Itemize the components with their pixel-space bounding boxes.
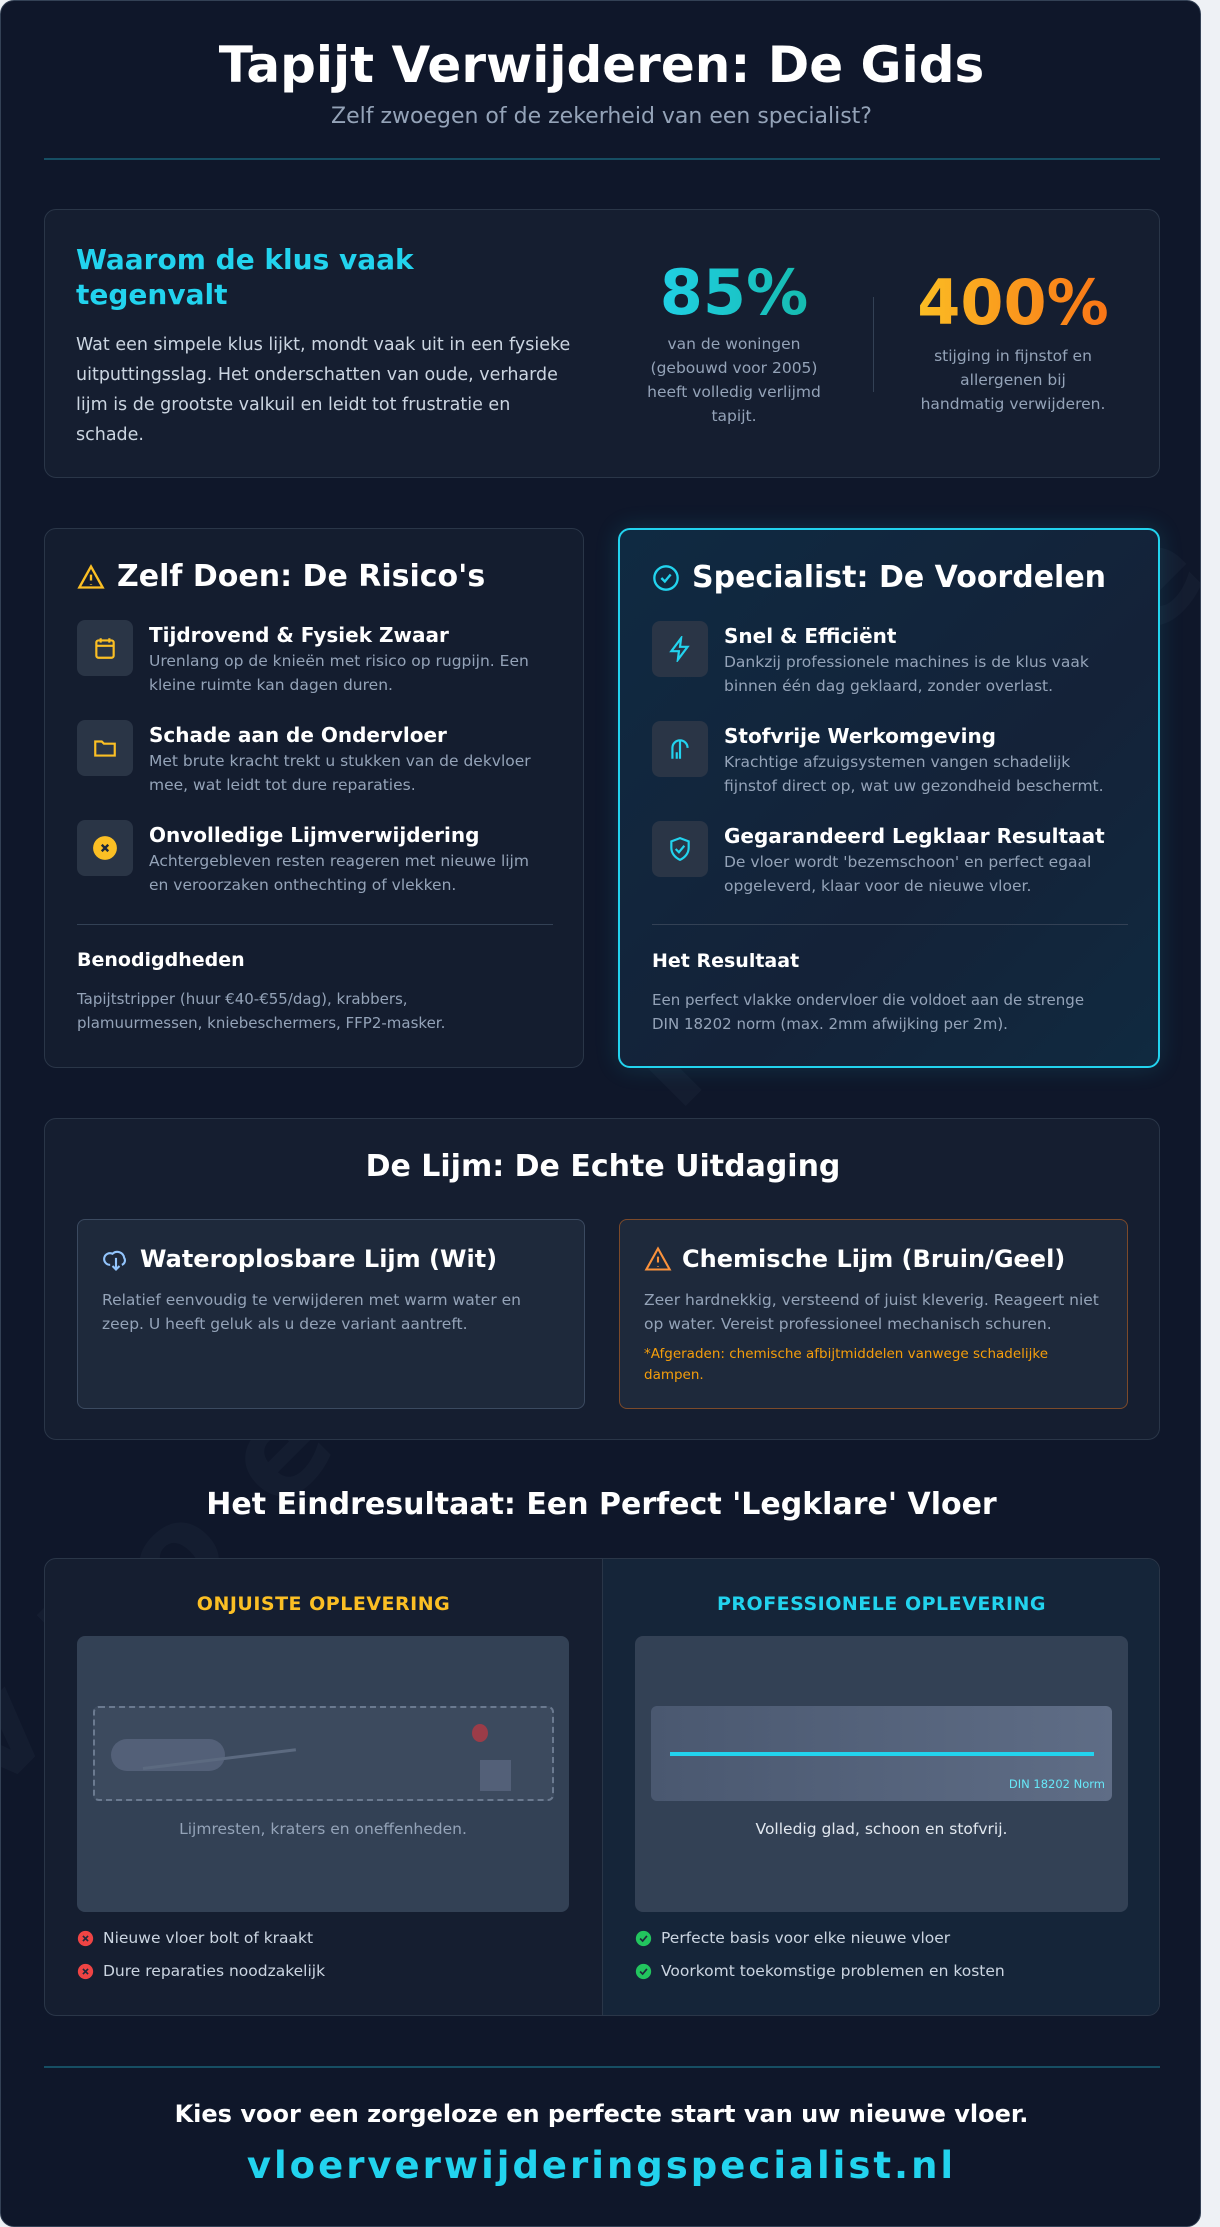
item snel: [652, 621, 1089, 695]
right illustration: [635, 1636, 1128, 1912]
het resultaat: Het Resultaat: [652, 950, 799, 972]
panel: compare: [44, 1558, 1160, 2016]
panel: specialist: Gegarandeerd Legklaar Resultaat: [724, 824, 1105, 848]
item 1: [77, 620, 529, 694]
panel: zelf doen: Urenlang op de knieën met risico op rugpijn. Een kleine ruimte kan dagen duren.: [149, 652, 529, 694]
panel: zelf doen: Achtergebleven resten reageren met nieuwe lijm en veroorzaken onthechting of vlekken.: [149, 852, 529, 894]
panel: zelf doen: Met brute kracht trekt u stukken van de dekvloer mee, wat leidt tot dure reparaties.: [149, 752, 531, 794]
stat 85%: van de woningen (gebouwd voor 2005) heeft volledig verlijmd tapijt.: [647, 335, 821, 425]
card: chemisch: Zeer hardnekkig, versteend of juist kleverig. Reageert niet op water. Vereist professioneel mechanisch schuren.: [644, 1291, 1099, 1333]
benodigdheden: [76, 949, 445, 1032]
card: chemisch: [619, 1219, 1128, 1409]
het resultaat: Een perfect vlakke ondervloer die voldoet aan de strenge DIN 18202 norm (max. 2mm afwijking per 2m).: [652, 991, 1084, 1033]
benodigdheden: Tapijtstripper (huur €40-€55/dag), krabbers, plamuurmessen, kniebeschermers, FFP2-masker.: [77, 990, 445, 1032]
right bullets: [636, 1929, 1005, 1980]
panel: specialist: Snel & Efficiënt: [724, 624, 896, 648]
left bullets: [78, 1929, 325, 1980]
item 2: [77, 720, 531, 794]
left bullets: Dure reparaties noodzakelijk: [103, 1962, 325, 1980]
panel: specialist: Krachtige afzuigsystemen vangen schadelijk fijnstof direct op, wat uw gezondheid beschermt.: [724, 753, 1104, 795]
heading specialist: Specialist: De Voordelen: [692, 560, 1106, 595]
panel: zelf doen: Onvolledige Lijmverwijdering: [149, 823, 479, 847]
panel: intro: [44, 209, 1160, 478]
left bullets: Nieuwe vloer bolt of kraakt: [103, 1929, 313, 1947]
left illustration: Lijmresten, kraters en oneffenheden.: [179, 1820, 467, 1838]
item 3: [77, 820, 529, 894]
item stofvrij: [652, 721, 1104, 795]
right bullets: Perfecte basis voor elke nieuwe vloer: [661, 1929, 950, 1947]
stat 85%: 85%: [660, 256, 808, 329]
right bullets: Voorkomt toekomstige problemen en kosten: [661, 1962, 1005, 1980]
card: wateroplosbaar: [77, 1219, 585, 1409]
item legklaar: [652, 821, 1105, 895]
subtitle: Zelf zwoegen of de zekerheid van een specialist?: [331, 104, 872, 129]
right label: PROFESSIONELE OPLEVERING: [717, 1593, 1046, 1615]
benodigdheden: Benodigdheden: [77, 949, 245, 971]
panel: zelf doen: Tijdrovend & Fysiek Zwaar: [149, 623, 449, 647]
panel: specialist: Dankzij professionele machines is de klus vaak binnen één dag geklaard, zonder overlast.: [724, 653, 1089, 695]
intro text: Wat een simpele klus lijkt, mondt vaak uit in een fysieke uitputtingsslag. Het onderschatten van oude, verharde lijm is de grootste valkuil en leidt tot frustratie en schade.: [76, 335, 570, 445]
footer url: vloerverwijderingspecialist.nl: [247, 2144, 956, 2187]
panel: specialist: Stofvrije Werkomgeving: [724, 724, 996, 748]
card: wateroplosbaar: Relatief eenvoudig te verwijderen met warm water en zeep. U heeft geluk als u deze variant aantreft.: [102, 1291, 521, 1333]
het resultaat: [652, 950, 1084, 1033]
stat 85%: [647, 256, 821, 425]
footer tagline: Kies voor een zorgeloze en perfecte start van uw nieuwe vloer.: [175, 2100, 1028, 2128]
heading zelf doen: Zelf Doen: De Risico's: [117, 559, 485, 594]
panel: zelf doen: Schade aan de Ondervloer: [149, 723, 447, 747]
panel: zelf doen: [44, 528, 584, 1068]
panel: specialist: De vloer wordt 'bezemschoon' en perfect egaal opgeleverd, klaar voor de nieuwe vloer.: [724, 853, 1091, 895]
heading eindresultaat: Het Eindresultaat: Een Perfect 'Legklare' Vloer: [206, 1487, 997, 1522]
right illustration: Volledig glad, schoon en stofvrij.: [756, 1820, 1007, 1838]
panel: lijm: [44, 1118, 1160, 1440]
left label: ONJUISTE OPLEVERING: [197, 1593, 450, 1615]
left illustration: [77, 1636, 569, 1912]
stat 400%: 400%: [917, 266, 1109, 339]
stat 400%: [917, 266, 1109, 413]
lijm heading: De Lijm: De Echte Uitdaging: [366, 1149, 840, 1184]
card: chemisch: Chemische Lijm (Bruin/Geel): [682, 1245, 1065, 1273]
right illustration: DIN 18202 Norm: [1009, 1777, 1105, 1791]
title: Tapijt Verwijderen: De Gids: [219, 36, 984, 94]
panel: specialist: [618, 528, 1160, 1068]
stat 400%: stijging in fijnstof en allergenen bij handmatig verwijderen.: [921, 347, 1105, 413]
intro heading: Waarom de klus vaak tegenvalt: [76, 243, 414, 311]
card: wateroplosbaar: Wateroplosbare Lijm (Wit): [140, 1245, 497, 1273]
card: chemisch: *Afgeraden: chemische afbijtmiddelen vanwege schadelijke dampen.: [644, 1346, 1048, 1383]
